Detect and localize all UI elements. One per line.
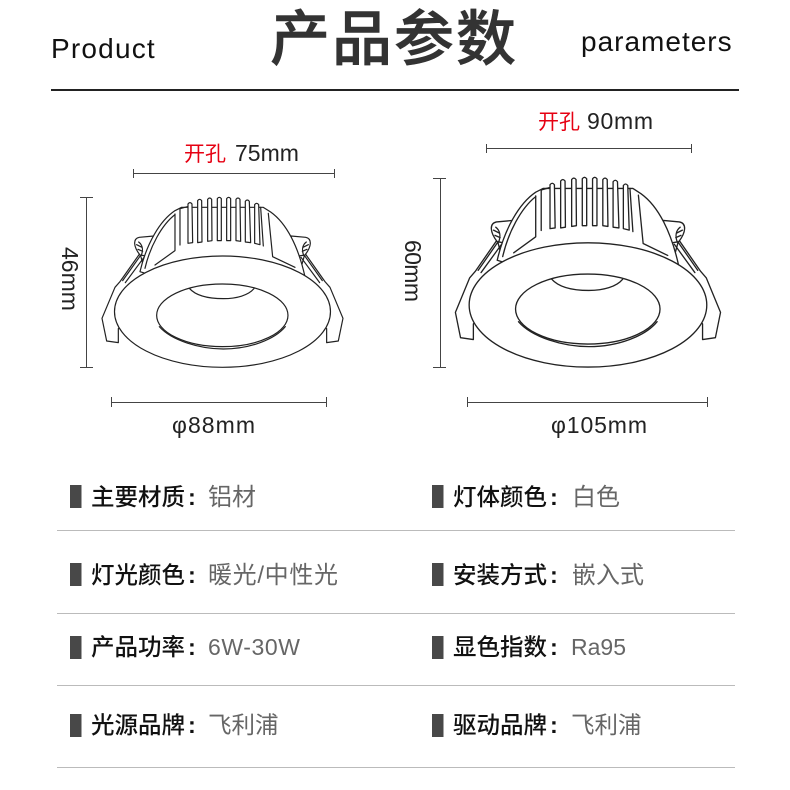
- line drawing: small lamp: [102, 197, 343, 367]
- spec: power: 6W-30W: [208, 634, 300, 660]
- spec: CRI: [432, 634, 626, 660]
- cut-out label 90mm: [538, 108, 653, 134]
- spec: body colour: 白色: [572, 484, 620, 511]
- spec: driver brand: 飞利浦: [571, 712, 642, 738]
- spec: driver brand: [432, 712, 642, 738]
- spec: power: [70, 634, 300, 660]
- heading: parameters: parameters: [581, 26, 733, 57]
- title: 产品参数: [270, 6, 518, 73]
- spec: CRI: 显色指数:: [453, 634, 558, 660]
- spec: light colour: [70, 562, 338, 589]
- spec: body colour: [432, 484, 620, 511]
- spec: light source brand: [70, 712, 278, 738]
- height label 46mm: 46mm: [57, 247, 83, 311]
- diameter label 88mm: φ88mm: [172, 412, 255, 438]
- spec: installation: [432, 562, 644, 589]
- height label 60mm: 60mm: [400, 240, 426, 302]
- cut-out label 75mm: 开孔: [184, 143, 226, 166]
- spec: CRI: Ra95: [571, 634, 626, 660]
- spec: material: 主要材质:: [91, 484, 196, 510]
- cut-out label 90mm: 开孔: [538, 111, 580, 134]
- spec: driver brand: 驱动品牌:: [453, 712, 558, 738]
- spec: installation: 安装方式:: [453, 562, 558, 588]
- diagram: small downlight: [57, 140, 343, 438]
- spec: body colour: 灯体颜色:: [453, 484, 558, 510]
- spec: material: [70, 484, 256, 511]
- diagram: large downlight: [400, 108, 721, 438]
- spec table: [57, 484, 735, 768]
- line drawing: large lamp: [455, 177, 721, 367]
- diameter label 105mm: φ105mm: [551, 412, 647, 438]
- heading: Product: Product: [51, 33, 156, 64]
- spec: light colour: 灯光颜色:: [91, 562, 196, 588]
- cut-out label 75mm: 75mm: [235, 140, 299, 166]
- cut-out label 75mm: [184, 140, 299, 166]
- spec: light colour: 暖光/中性光: [208, 562, 338, 589]
- spec: light source brand: 光源品牌:: [91, 712, 196, 738]
- spec: material: 铝材: [208, 484, 256, 511]
- spec: installation: 嵌入式: [572, 562, 644, 589]
- cut-out label 90mm: 90mm: [587, 108, 653, 134]
- spec: power: 产品功率:: [91, 634, 196, 660]
- spec: light source brand: 飞利浦: [208, 712, 278, 738]
